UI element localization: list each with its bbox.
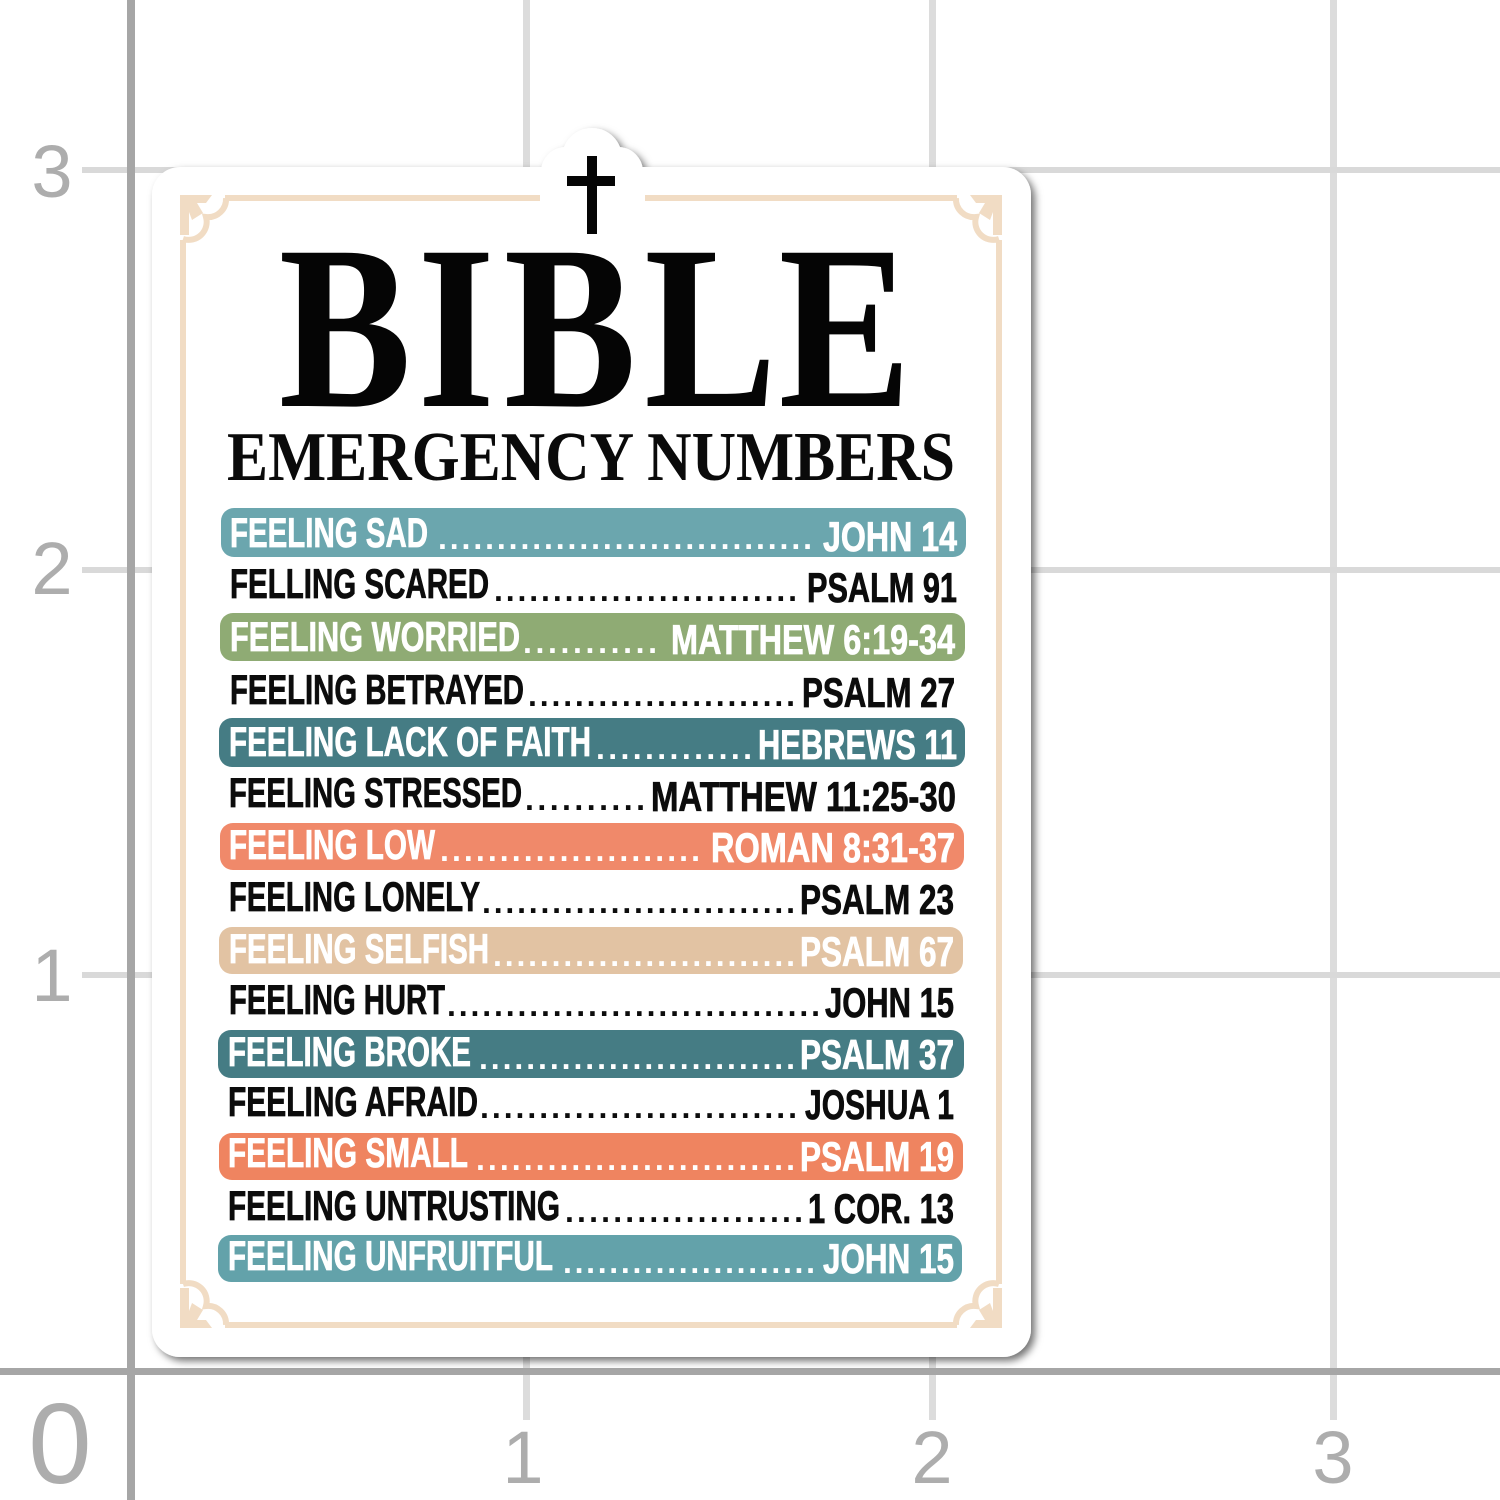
row: feeling small: FEELING SMALL xyxy=(228,1129,468,1176)
row: feeling low xyxy=(220,821,964,871)
row: feeling lack of faith: ............. xyxy=(596,730,752,766)
row: feeling betrayed: PSALM 27 xyxy=(802,669,955,716)
row: feeling stressed xyxy=(229,769,956,820)
row: feeling lonely: ........................... xyxy=(482,884,795,920)
row: feeling betrayed: FEELING BETRAYED xyxy=(230,666,524,713)
decorative frame xyxy=(180,195,1002,1328)
ruler labels: 1 xyxy=(31,934,73,1017)
row: feeling untrusting: .................... xyxy=(565,1193,803,1229)
ruler labels: 2 xyxy=(31,527,73,610)
row: feeling broke xyxy=(218,1028,964,1078)
row: feeling untrusting xyxy=(228,1182,954,1232)
row: feeling untrusting: FEELING UNTRUSTING xyxy=(228,1182,560,1229)
row: feeling worried: ........... xyxy=(523,624,657,660)
row: feeling hurt: ................................ xyxy=(447,987,820,1023)
row: feeling selfish: .......................... xyxy=(493,937,795,973)
row: feeling small: PSALM 19 xyxy=(800,1133,954,1180)
row: feeling broke: ........................... xyxy=(479,1040,795,1076)
row: feeling unfruitful: FEELING UNFRUITFUL xyxy=(228,1232,553,1279)
row: feeling sad xyxy=(221,508,966,560)
row: feeling broke: FEELING BROKE xyxy=(228,1028,471,1075)
row: feeling sad: ................................ xyxy=(438,520,812,556)
row: felling scared: .......................... xyxy=(494,572,797,608)
row: feeling worried: MATTHEW 6:19-34 xyxy=(671,616,955,663)
row: felling scared: PSALM 91 xyxy=(807,564,957,611)
row: feeling low: ...................... xyxy=(440,832,700,868)
ruler labels: 3 xyxy=(31,130,73,213)
row: feeling hurt: FEELING HURT xyxy=(229,976,445,1023)
row: feeling lack of faith: FEELING LACK OF FAITH xyxy=(229,718,591,765)
row: feeling stressed: FEELING STRESSED xyxy=(229,769,522,816)
row: feeling lonely: PSALM 23 xyxy=(800,876,954,923)
row: feeling unfruitful: JOHN 15 xyxy=(823,1235,954,1282)
row: feeling unfruitful xyxy=(218,1232,962,1282)
ruler labels: 2 xyxy=(911,1416,953,1499)
icon: cross xyxy=(567,156,615,234)
row: feeling sad: JOHN 14 xyxy=(823,513,957,560)
row: feeling worried xyxy=(220,613,965,663)
row: feeling selfish xyxy=(219,925,963,975)
subtitle: Emergency Numbers: EMERGENCY NUMBERS xyxy=(227,419,955,496)
row: feeling sad: FEELING SAD xyxy=(230,509,428,556)
row: feeling betrayed xyxy=(230,666,955,716)
row: feeling lonely xyxy=(229,873,954,923)
row: feeling betrayed: ....................... xyxy=(528,677,795,713)
row: feeling afraid: FEELING AFRAID xyxy=(228,1078,478,1125)
row: feeling hurt xyxy=(229,976,954,1026)
row: feeling selfish: FEELING SELFISH xyxy=(229,925,489,972)
row: feeling small: ........................... xyxy=(476,1141,795,1177)
row: feeling untrusting: 1 COR. 13 xyxy=(808,1185,954,1232)
row: feeling afraid xyxy=(228,1078,954,1128)
row: feeling selfish: PSALM 67 xyxy=(800,928,954,975)
row: feeling unfruitful: ...................... xyxy=(563,1244,815,1280)
row: feeling broke: PSALM 37 xyxy=(800,1031,954,1078)
title: BIBLE: BIBLE xyxy=(279,197,911,457)
row: feeling small xyxy=(219,1129,963,1180)
row: feeling lack of faith: HEBREWS 11 xyxy=(758,721,957,768)
row: felling scared xyxy=(230,560,957,611)
row: feeling stressed: MATTHEW 11:25-30 xyxy=(651,773,956,820)
row: feeling hurt: JOHN 15 xyxy=(825,979,954,1026)
row: feeling low: ROMAN 8:31-37 xyxy=(711,824,955,871)
row: feeling afraid: ........................... xyxy=(480,1089,797,1125)
row: feeling lack of faith xyxy=(219,718,965,768)
sticker card xyxy=(152,128,1031,1357)
row: feeling stressed: .......... xyxy=(525,781,645,817)
row: feeling worried: FEELING WORRIED xyxy=(230,613,520,660)
ruler labels: 1 xyxy=(502,1416,544,1499)
row: feeling lonely: FEELING LONELY xyxy=(229,873,480,920)
row: feeling afraid: JOSHUA 1 xyxy=(805,1081,954,1128)
row: felling scared: FELLING SCARED xyxy=(230,560,489,607)
row: feeling low: FEELING LOW xyxy=(229,821,435,868)
ruler labels: 3 xyxy=(1312,1416,1354,1499)
